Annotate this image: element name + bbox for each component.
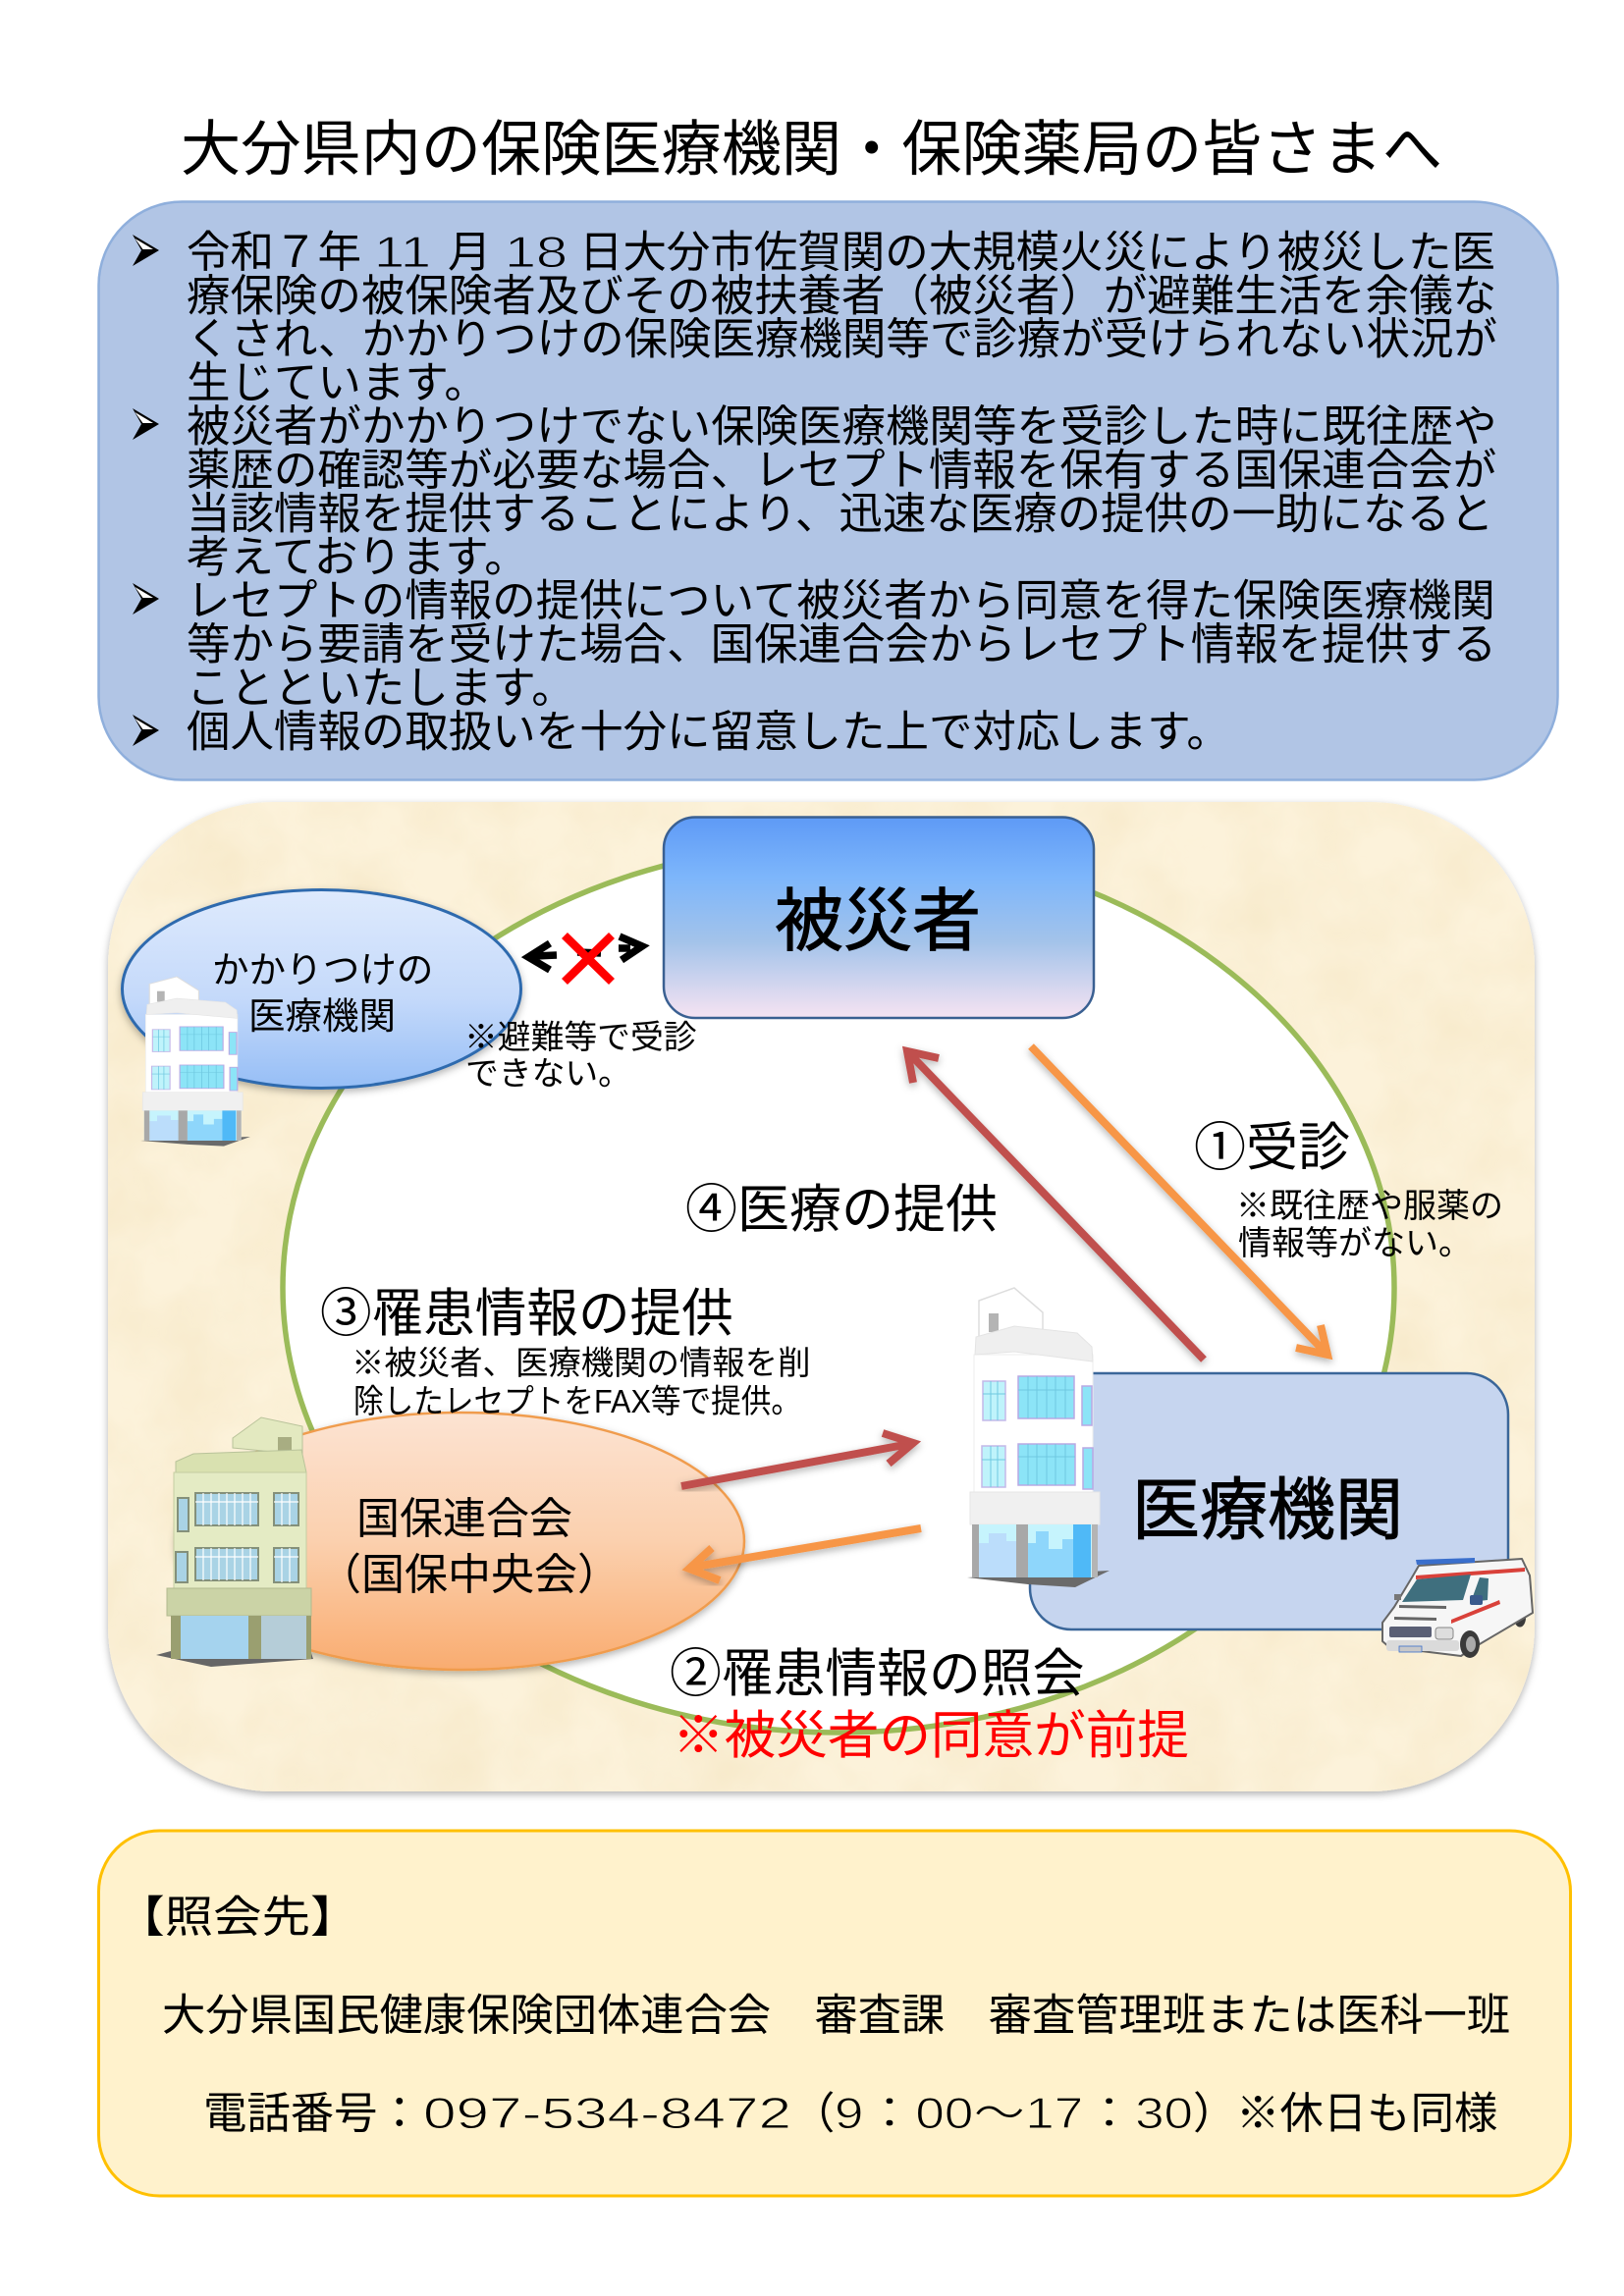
text: second point [187,402,1497,582]
label: step 3: ③罹患情報の提供 [320,1285,733,1343]
text: first point: くされ、かかりつけの保険医療機関等で診療が受けられない状況が [187,316,1497,364]
text: first point: 18 [505,229,568,277]
text: third point: ことといたします。 [187,665,575,713]
bullet: second point [133,408,159,440]
note: consent required: ※被災者の同意が前提 [673,1707,1189,1765]
ellipse: regular medical institution [122,889,520,1088]
contact organisation: 大分県国民健康保険団体連合会 審査課 審査管理班または医科一班 [162,1992,1510,2040]
arrow: step 3 information provided [681,1433,913,1486]
diagram background [108,802,1535,1791]
contact phone and hours: 9：00～17：30 [835,2090,1193,2138]
text: third point [187,577,1496,713]
note: step 3 [352,1346,810,1420]
contact background [98,1831,1571,2196]
note: step 3: 除したレセプトをFAX等で提供。 [353,1384,801,1420]
label: step 1: ①受診 [1194,1119,1350,1177]
label: step 4: ④医療の提供 [685,1181,998,1239]
text: first point: 日大分市佐賀関の大規模火災により被災した医 [579,229,1495,277]
icon: red cross [565,935,612,982]
note: step 1: 情報等がない。 [1238,1225,1472,1262]
contact phone and hours: （ [791,2090,835,2138]
note: cannot visit: できない。 [465,1055,631,1093]
panel: contact [98,1831,1571,2196]
note: cannot visit [464,1019,697,1093]
ellipse: regular medical institution: 医療機関 [248,995,396,1037]
text: fourth point: 個人情報の取扱いを十分に留意した上で対応します。 [187,708,1230,756]
arrow: step 2 inquiry [689,1528,921,1580]
text: third point: 等から要請を受けた場合、国保連合会からレセプト情報を提供する [187,620,1496,669]
bullet: third point [133,583,159,614]
box: medical institution [1030,1373,1508,1629]
contact phone and hours: ※休日も同様 [1236,2090,1497,2138]
text: second point: 当該情報を提供することにより、迅速な医療の提供の一助になると [187,490,1493,538]
text: first point: 療保険の被保険者及びその被扶養者（被災者）が避難生活を余儀な [187,272,1496,320]
diagram paper texture [108,802,1535,1791]
text: first point: 生じています。 [187,359,488,407]
arrow: step 1 visit [1031,1046,1327,1355]
panel: flow diagram [108,802,1535,1791]
contact phone and hours [203,2090,1497,2138]
bullet: first point [133,235,159,266]
ellipse: national health insurance federation: 国保連合会 [356,1495,572,1543]
text: second point: 薬歴の確認等が必要な場合、レセプト情報を保有する国保連合会が [187,447,1496,495]
note: step 1: ※既往歴や服薬の [1236,1188,1503,1225]
contact phone and hours: 電話番号： [203,2090,421,2138]
arrow: blocked access [528,935,642,982]
text: first point: 11 [374,229,431,277]
text: third point: レセプトの情報の提供について被災者から同意を得た保険医療機関 [187,577,1495,625]
note: step 1 [1236,1188,1503,1262]
cycle circle [283,843,1394,1733]
icon: ambulance [1382,1558,1533,1658]
bullet: fourth point [133,715,159,746]
box: disaster victims [664,817,1094,1018]
box: medical institution: 医療機関 [1132,1472,1403,1548]
panel: summary [98,202,1557,779]
text: first point: 月 [448,229,491,277]
text: first point [187,229,1497,407]
title: 大分県内の保険医療機関・保険薬局の皆さまへ [181,116,1442,183]
icon: large white building [967,1288,1110,1587]
icon: green building [156,1417,313,1667]
label: step 2: ②罹患情報の照会 [670,1645,1084,1703]
ellipse: national health insurance federation: （国保中央会） [318,1551,621,1599]
note: step 3: ※被災者、医療機関の情報を削 [352,1346,810,1382]
contact phone and hours: 097-534-8472 [423,2090,791,2138]
summary background [98,202,1557,779]
text: second point: 被災者がかかりつけでない保険医療機関等を受診した時に既往歴や [187,402,1497,452]
contact heading: 【照会先】 [116,1894,358,1942]
contact phone and hours: ） [1193,2090,1236,2138]
text: first point: 令和７年 [187,229,361,277]
note: cannot visit: ※避難等で受診 [464,1019,697,1056]
icon: small white building [140,977,250,1147]
text: second point: 考えております。 [187,534,528,582]
ellipse: national health insurance federation [177,1413,744,1670]
box: disaster victims: 被災者 [775,883,981,960]
arrow: step 4 medical care [907,1051,1204,1360]
ellipse: regular medical institution: かかりつけの [212,949,433,990]
